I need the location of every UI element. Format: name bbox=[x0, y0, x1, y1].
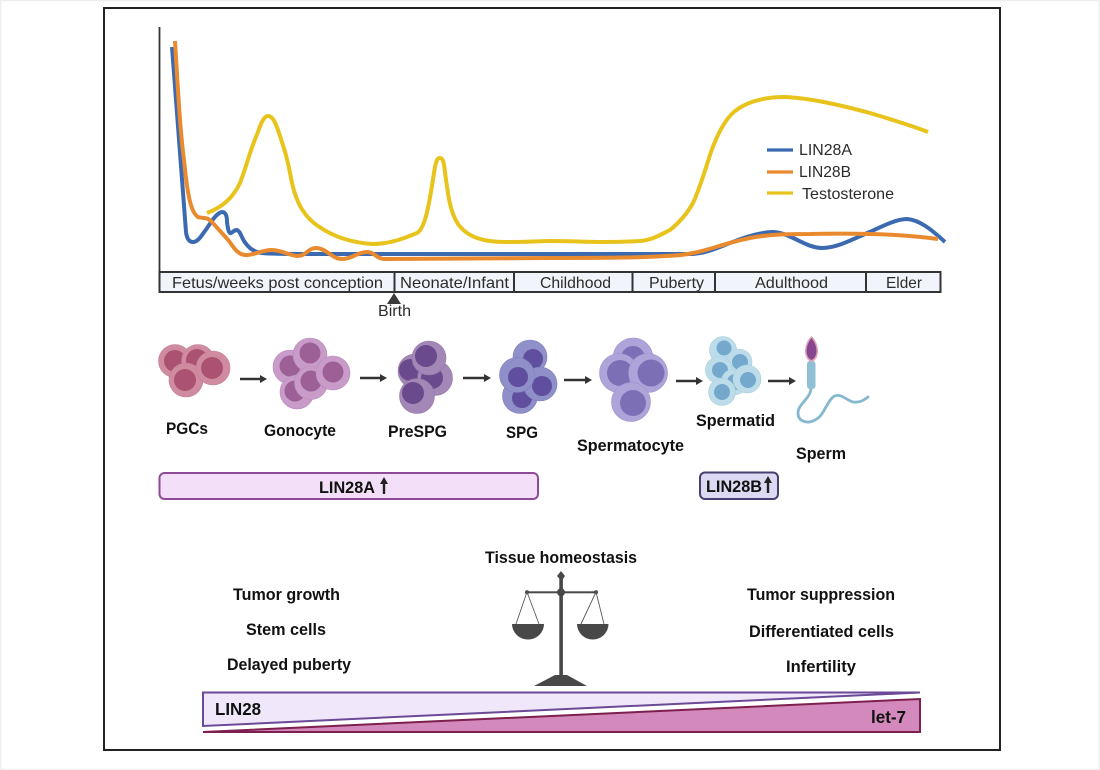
cell labels: Gonocyte bbox=[264, 422, 336, 440]
timeline bar: Childhood bbox=[540, 275, 611, 292]
LIN28B box bbox=[700, 472, 778, 499]
arrow bbox=[768, 377, 796, 385]
curve: LIN28B bbox=[175, 41, 938, 259]
cell cluster: PreSPG bbox=[398, 341, 452, 414]
right list: Differentiated cells bbox=[749, 623, 894, 641]
cell labels: Spermatocyte bbox=[577, 437, 684, 455]
arrow bbox=[564, 376, 592, 384]
arrow bbox=[240, 375, 267, 383]
timeline bar: Puberty bbox=[649, 275, 704, 292]
arrow bbox=[676, 377, 703, 385]
left list: Stem cells bbox=[246, 621, 326, 639]
right list: Tumor suppression bbox=[747, 586, 895, 604]
legend bbox=[767, 142, 894, 203]
chart: expression over lifespan bbox=[160, 27, 945, 272]
cell labels: PGCs bbox=[166, 420, 208, 438]
LIN28B box: LIN28B bbox=[706, 478, 762, 496]
legend: Testosterone bbox=[802, 186, 894, 203]
timeline bar bbox=[160, 272, 940, 292]
cell cluster: Gonocyte bbox=[273, 338, 350, 409]
arrow bbox=[360, 374, 387, 382]
LIN28A bar: LIN28A bbox=[319, 479, 375, 497]
cell labels: PreSPG bbox=[388, 423, 447, 441]
birth marker: Birth bbox=[378, 303, 411, 320]
timeline bar: Adulthood bbox=[755, 275, 828, 292]
arrow bbox=[463, 374, 491, 382]
right list: Infertility bbox=[786, 658, 857, 676]
timeline bar: Elder bbox=[886, 275, 923, 292]
cell labels: Spermatid bbox=[696, 412, 775, 430]
heading: tissue homeostasis: Tissue homeostasis bbox=[485, 549, 637, 567]
timeline bar: Neonate/Infant bbox=[400, 275, 510, 292]
left list bbox=[227, 586, 352, 674]
wedge: let-7: let-7 bbox=[871, 707, 906, 727]
LIN28A bar bbox=[160, 473, 538, 499]
cell labels: Sperm bbox=[796, 445, 846, 463]
curve: LIN28A bbox=[172, 47, 945, 254]
legend: LIN28B bbox=[799, 164, 851, 181]
cell labels bbox=[166, 412, 846, 463]
cell cluster: Spermatocyte bbox=[600, 338, 668, 422]
wedge: let-7 bbox=[203, 699, 920, 732]
cell cluster: PGCs bbox=[158, 344, 230, 397]
icon: sperm bbox=[798, 336, 868, 422]
wedge: LIN28 bbox=[203, 692, 920, 726]
outer frame bbox=[104, 8, 1000, 750]
cell labels: SPG bbox=[506, 424, 538, 442]
left list: Tumor growth bbox=[233, 586, 340, 604]
wedge: LIN28: LIN28 bbox=[215, 699, 261, 719]
y axis bbox=[158, 27, 160, 272]
right list bbox=[747, 586, 895, 676]
legend: LIN28A bbox=[799, 142, 852, 159]
timeline bar: Fetus/weeks post conception bbox=[172, 275, 383, 292]
cell cluster: Spermatid bbox=[706, 336, 761, 406]
left list: Delayed puberty bbox=[227, 656, 352, 674]
icon: balance scale bbox=[512, 571, 608, 686]
cell cluster: SPG bbox=[500, 340, 557, 414]
curve: testosterone bbox=[207, 97, 928, 244]
birth marker bbox=[378, 293, 411, 320]
